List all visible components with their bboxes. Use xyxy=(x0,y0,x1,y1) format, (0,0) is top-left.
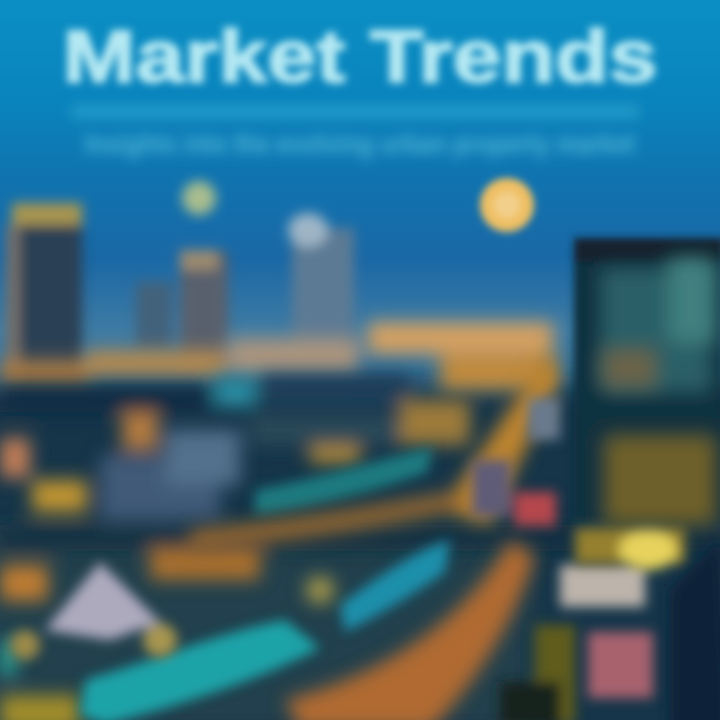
icon: large sun xyxy=(480,178,534,232)
teal river lower xyxy=(80,620,320,720)
left tower xyxy=(6,203,82,388)
subtitle: Insights into the evolving urban property market xyxy=(85,128,635,159)
horizon glow xyxy=(0,322,553,390)
subtitle xyxy=(70,106,640,159)
skyline towers xyxy=(6,203,354,388)
centre tower xyxy=(288,213,354,358)
city ground base xyxy=(0,385,720,720)
small centre-left towers xyxy=(136,250,228,367)
lit plaza xyxy=(575,528,685,570)
dark foreground tower xyxy=(670,540,720,720)
city district blocks xyxy=(0,375,720,720)
right glass tower xyxy=(574,238,720,525)
right shops xyxy=(472,398,653,720)
teal river middle xyxy=(340,540,450,632)
icon: small sun xyxy=(182,181,216,215)
teal river upper xyxy=(255,447,432,515)
orange boulevard xyxy=(190,350,560,720)
white pyramid roof xyxy=(10,562,177,660)
title: Market Trends xyxy=(62,15,658,98)
